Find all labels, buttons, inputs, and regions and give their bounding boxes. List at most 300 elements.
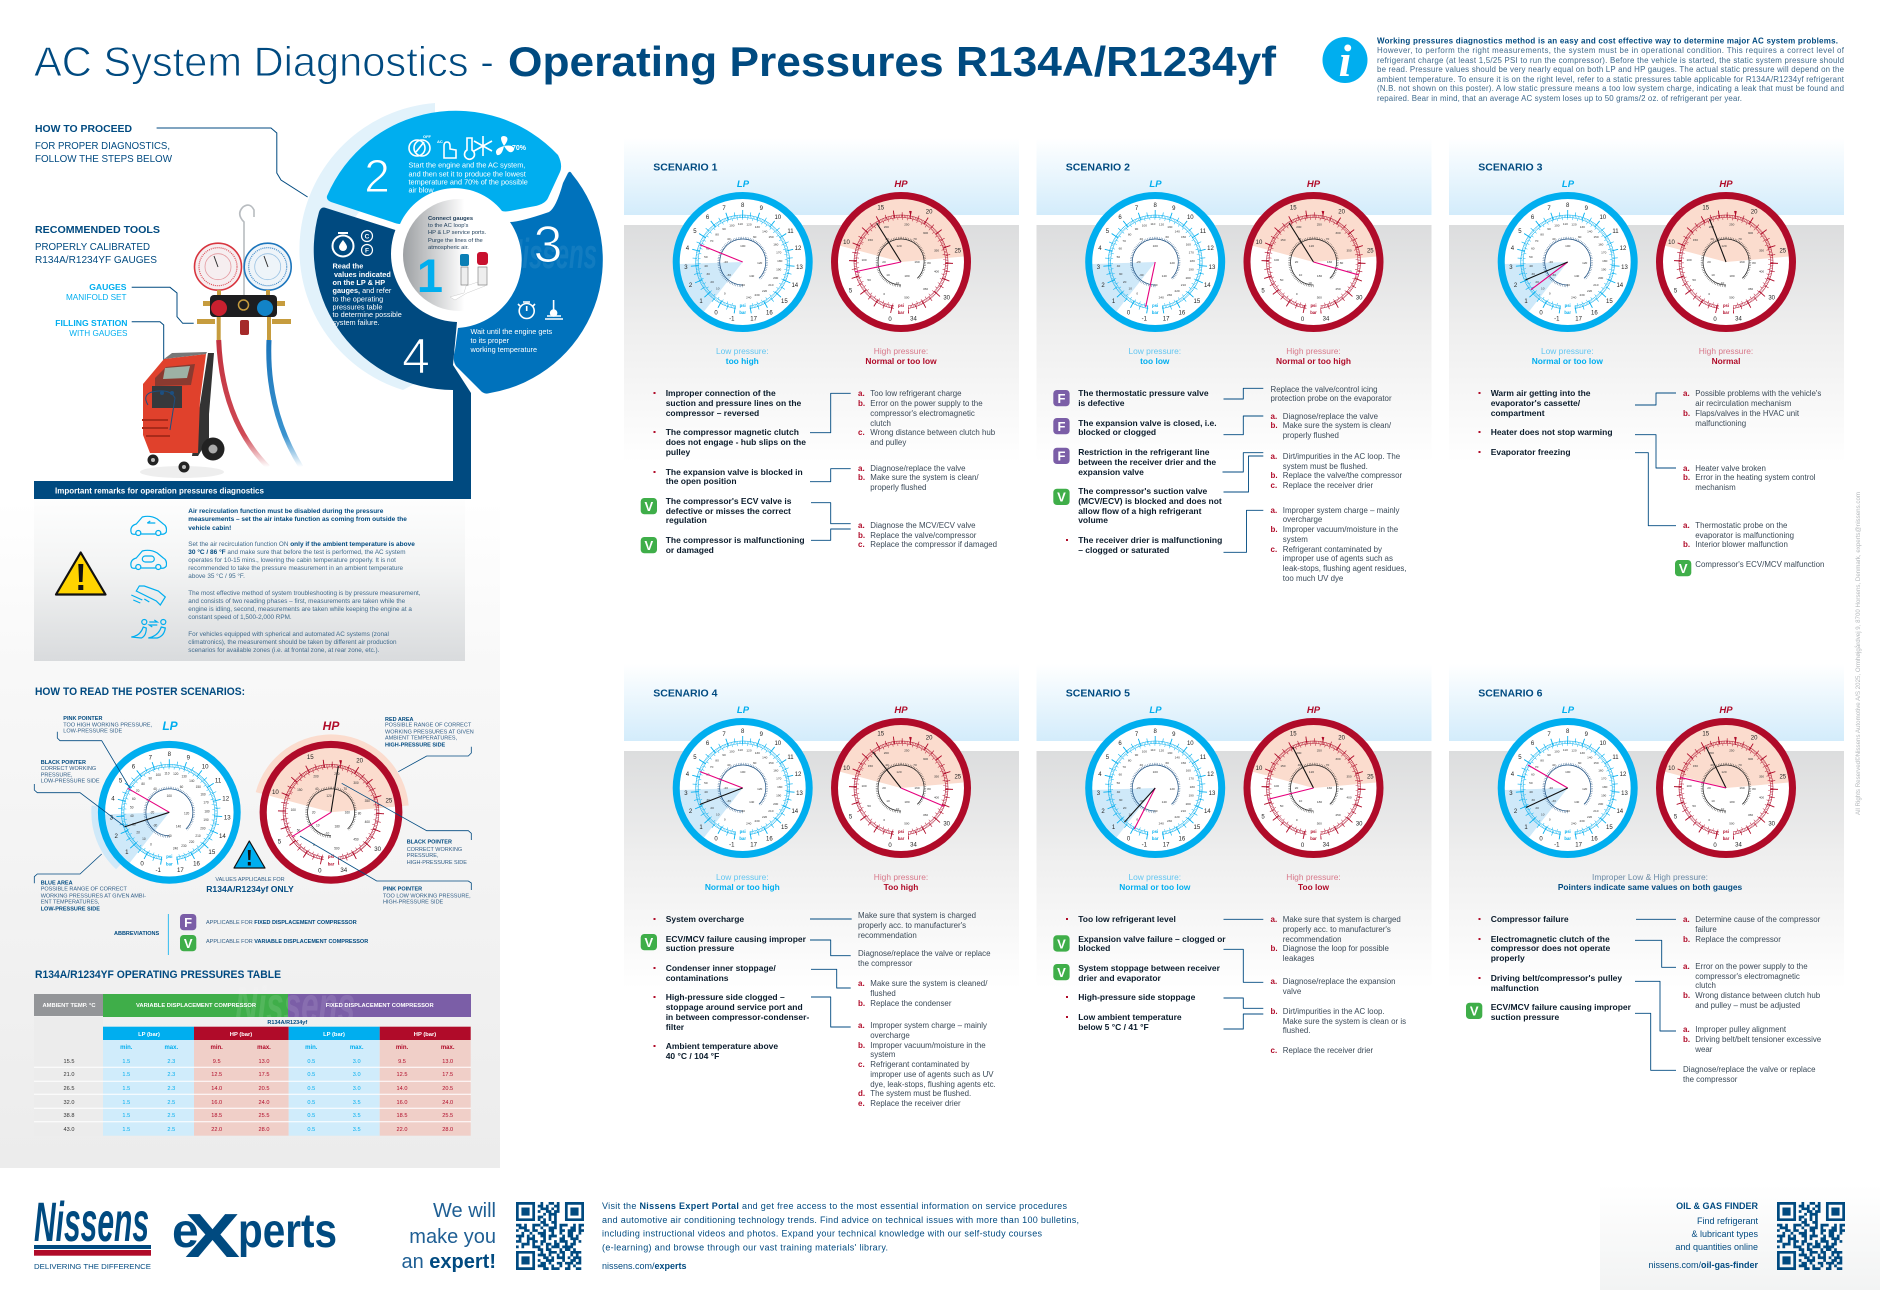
causes list [1053, 388, 1222, 555]
note: values applicable: R134A/R1234yf ONLY [206, 884, 294, 894]
table: operating pressures: 3.5 [353, 1100, 361, 1106]
solutions list: The system must be flushed. [870, 1089, 971, 1098]
icon: warning triangle [56, 552, 106, 594]
icon: car recirculation on [131, 550, 167, 570]
icon: info: i [1339, 35, 1352, 86]
remarks text: 30 °C / 86 °F and make sure that before the test is performed, the AC system [188, 548, 405, 556]
solutions list: Heater valve broken [1695, 464, 1766, 473]
causes list: Warm air getting into the [1491, 388, 1591, 398]
table: operating pressures: 22.0 [211, 1127, 222, 1133]
solutions list: too much UV dye [1283, 574, 1344, 583]
logo: Nissens: Nissens [34, 1190, 149, 1253]
solutions list: Refrigerant contaminated by [870, 1060, 969, 1069]
panel: step 4 [314, 208, 471, 481]
table: operating pressures: 1.5 [122, 1100, 130, 1106]
solutions list: Replace the receiver drier [870, 1099, 961, 1108]
gauge: LP [1089, 722, 1222, 854]
gauge: example LP [91, 744, 237, 880]
connector lines [810, 393, 851, 540]
gauge: HP [834, 722, 968, 854]
connector lines [1222, 388, 1263, 552]
panel: step 3: Nissens [505, 230, 597, 277]
gauge: HP [1247, 722, 1380, 854]
title: AC System Diagnostics - [34, 38, 494, 85]
table: operating pressures: 32.0 [64, 1100, 74, 1106]
table: operating pressures: 3.5 [353, 1113, 361, 1119]
icon: service port fittings [450, 252, 488, 300]
causes list: – clogged or saturated [1078, 545, 1169, 555]
abbreviations legend: ABBREVIATIONS [114, 931, 159, 937]
solutions list: b. [858, 473, 865, 482]
icons: stopwatch and thermometer [518, 300, 563, 319]
table: operating pressures: HP (bar) [230, 1032, 252, 1038]
table: operating pressures: 0.5 [307, 1086, 315, 1092]
table: operating pressures: 2.3 [167, 1072, 175, 1078]
icon: blue warning triangle [234, 841, 265, 868]
panel: scenario 1: LP [737, 179, 750, 190]
intro text block: repaired. Bear in mind, that an average AC system loses up to 50 grams/2 oz. of refrigerant per year. [1377, 94, 1742, 103]
panel: step 2: AC [437, 139, 443, 144]
table: operating pressures: 2.5 [167, 1127, 175, 1133]
panel: important remarks [34, 481, 471, 661]
solutions list: a. [858, 979, 865, 988]
causes list [641, 914, 809, 1061]
slogan: make you [409, 1226, 496, 1248]
solutions list: d. [858, 1089, 865, 1098]
panel: step 2: temperature and 70% of the possible [408, 177, 528, 186]
causes list: Heater does not stop warming [1491, 427, 1613, 437]
table: operating pressures: 2.3 [167, 1059, 175, 1065]
annotation: pink pointer LP: TOO HIGH WORKING PRESSURE, [63, 723, 153, 729]
text block: recommended tools: RECOMMENDED TOOLS [35, 224, 160, 236]
panel: scenario 3 [1449, 138, 1844, 576]
slogan: We will [433, 1200, 496, 1222]
solutions list: Make sure the system is clean/ [1283, 421, 1392, 430]
annotation: blue area: BLUE AREA [41, 881, 73, 887]
solutions list: the compressor [1683, 1075, 1738, 1084]
causes list: The receiver drier is malfunctioning [1078, 535, 1222, 545]
gauge labels: LP [162, 719, 179, 733]
heading: how to read: HOW TO READ THE POSTER SCENARIOS: [35, 686, 245, 698]
causes list: ECV/MCV failure causing improper [666, 934, 807, 944]
gauge: LP [676, 196, 809, 328]
table: operating pressures: min. [305, 1045, 318, 1051]
solutions list: air recirculation mechanism [1695, 399, 1792, 408]
causes list: in between compressor-condenser- [666, 1012, 809, 1022]
causes list [1466, 914, 1632, 1022]
annotation: black pointer HP: HIGH-PRESSURE SIDE [407, 860, 467, 866]
table: operating pressures: 2.5 [167, 1100, 175, 1106]
causes list: malfunction [1491, 983, 1539, 993]
solutions list: system [1283, 535, 1308, 544]
solutions list: c. [858, 428, 865, 437]
solutions list: clutch [870, 419, 891, 428]
solutions list: a. [1683, 962, 1690, 971]
solutions list: Make sure that system is charged [1283, 915, 1401, 924]
panel: scenario 5 [1036, 664, 1432, 1055]
remarks text: above 35 °C / 95 °F. [188, 572, 245, 580]
panel: step 4: Read the [332, 262, 363, 271]
remarks text: engine is idling, second, measurements are taken while keeping the engine at a [188, 606, 412, 613]
gauge readings [1532, 346, 1753, 366]
table: operating pressures: 24.0 [442, 1100, 453, 1106]
causes list: is defective [1078, 398, 1125, 408]
gauge readings: Normal or too low [865, 356, 937, 366]
heading: pressures table: R134A/R1234YF OPERATING PRESSURES TABLE [35, 969, 281, 981]
remarks text: vehicle cabin! [188, 525, 231, 532]
causes list: contaminations [666, 973, 729, 983]
solutions list: Diagnose/replace the expansion [1283, 977, 1396, 986]
causes list: below 5 °C / 41 °F [1078, 1022, 1149, 1032]
table: operating pressures: max. [164, 1045, 178, 1051]
solutions list: b. [1270, 525, 1278, 534]
table: operating pressures: 16.0 [211, 1100, 222, 1106]
causes list: System overcharge [666, 914, 744, 924]
table: operating pressures: 24.0 [259, 1100, 269, 1106]
solutions list: Possible problems with the vehicle's [1695, 389, 1821, 398]
gauge readings: High pressure: [1699, 346, 1753, 356]
table: operating pressures: min. [120, 1045, 133, 1051]
table: operating pressures: min. [396, 1045, 408, 1051]
solutions list: Error on the power supply to the [870, 399, 983, 408]
solutions list [858, 911, 996, 1108]
intro text block: However, to perform the right measurements, the system must be in operational condition. This requires a correct level of [1377, 46, 1845, 55]
table: operating pressures: 3.0 [353, 1086, 361, 1092]
connector lines [1635, 919, 1676, 1070]
solutions list: a. [858, 389, 865, 398]
gauge readings: Normal or too high [1276, 356, 1351, 366]
solutions list: Diagnose/replace the valve [1283, 412, 1379, 421]
gauge readings [1119, 872, 1341, 892]
gauge: HP [1660, 722, 1792, 854]
oil and gas finder text [1648, 1201, 1758, 1270]
table: operating pressures: 3.5 [353, 1127, 361, 1133]
solutions list: b. [1683, 935, 1690, 944]
table: operating pressures: max. [257, 1045, 271, 1051]
solutions list: Improper system charge – mainly [870, 1021, 987, 1030]
panel: step 3: 3 [534, 216, 562, 274]
panel: step 2: 2 [364, 150, 390, 202]
solutions list: Improper pulley alignment [1695, 1025, 1787, 1034]
causes list: The compressor is malfunctioning [666, 535, 805, 545]
text block: filling station label [55, 318, 128, 338]
causes list: (MCV/ECV) is blocked and does not [1078, 496, 1222, 506]
gauge readings: Improper Low & High pressure: [1592, 872, 1708, 882]
solutions list: b. [1683, 473, 1690, 482]
solutions list: b. [858, 531, 865, 540]
gauge readings [716, 346, 937, 366]
panel: scenario 1: SCENARIO 1 [653, 162, 718, 174]
solutions list: Replace the condenser [870, 999, 952, 1008]
slogan: an expert! [401, 1251, 496, 1273]
panel: scenario 5: SCENARIO 5 [1066, 688, 1130, 700]
solutions list: malfunctioning [1695, 419, 1746, 428]
panel: step 4: on the LP & HP [332, 278, 385, 287]
solutions list: b. [858, 999, 865, 1008]
table: operating pressures: 0.5 [307, 1113, 315, 1119]
solutions list: improper use of agents such as UV [870, 1070, 994, 1079]
title: Operating Pressures R134A/R1234yf [508, 38, 1277, 85]
solutions list: Replace the receiver drier [1283, 1046, 1374, 1055]
solutions list: c. [1270, 545, 1277, 554]
solutions list: Error on the power supply to the [1695, 962, 1808, 971]
panel: scenario 5: LP [1149, 705, 1162, 716]
causes list: Compressor failure [1491, 914, 1569, 924]
panel: step 4: system failure. [332, 318, 380, 327]
solutions list: b. [1683, 991, 1690, 1000]
remarks text: operates for 10-15 mins., lowering the cabin temperature properly. It is not [188, 557, 396, 564]
table: operating pressures: 22.0 [397, 1127, 407, 1133]
slogan [401, 1200, 496, 1273]
table: operating pressures: FIXED DISPLACEMENT COMPRESSOR [326, 1003, 434, 1009]
panel: step 4: gauges, and refer [332, 286, 392, 295]
logo: Nissens: DELIVERING THE DIFFERENCE [34, 1262, 151, 1271]
table: operating pressures: 2.3 [167, 1086, 175, 1092]
remarks text: Air recirculation function must be disabled during the pressure [188, 508, 384, 515]
solutions list: dye, leak-stops, flushing agents etc. [870, 1080, 996, 1089]
gauge readings [705, 872, 928, 892]
solutions list: recommendation [1283, 935, 1342, 944]
annotation: red area: POSSIBLE RANGE OF CORRECT [385, 723, 472, 729]
solutions list: a. [1683, 521, 1690, 530]
table: operating pressures: Nissens [235, 977, 355, 1033]
table: operating pressures: 3.0 [353, 1059, 361, 1065]
solutions list: properly acc. to manufacturer's [1283, 925, 1391, 934]
icon: stopwatch and units [332, 230, 372, 256]
panel: scenario 6: HP [1719, 705, 1733, 716]
panel: step 1 hub: atmospheric air. [428, 245, 469, 251]
gauge readings: High pressure: [874, 346, 928, 356]
text block: gauges label: GAUGES [89, 282, 127, 292]
solutions list: Replace the valve/control icing [1270, 385, 1378, 394]
causes list: filter [666, 1022, 685, 1032]
table: operating pressures: 0.5 [307, 1100, 315, 1106]
remarks text: Set the air recirculation function ON only if the ambient temperature is above [188, 541, 415, 548]
abbreviations legend: APPLICABLE FOR VARIABLE DISPLACEMENT COMPRESSOR [206, 939, 368, 945]
causes list: Electromagnetic clutch of the [1491, 934, 1610, 944]
icon: QR code expert portal [516, 1202, 584, 1270]
annotation: red area: AMBIENT TEMPERATURES, [385, 736, 458, 742]
causes list: evaporator's cassette/ [1491, 398, 1581, 408]
table: operating pressures: 25.5 [442, 1113, 453, 1119]
table: operating pressures: LP (bar) [323, 1032, 345, 1038]
gauge readings: Normal or too high [705, 882, 780, 892]
gauge readings: Low pressure: [1128, 872, 1181, 882]
causes list: allow flow of a high refrigerant [1078, 506, 1202, 516]
solutions list: flushed. [1283, 1026, 1310, 1035]
gauge: HP [1247, 196, 1380, 328]
table: operating pressures: 0.5 [307, 1072, 315, 1078]
table: operating pressures: 26.5 [64, 1086, 74, 1092]
remarks text: and consists of two reading phases – first, measurements are taken while the [188, 598, 406, 605]
table: operating pressures: 43.0 [64, 1127, 74, 1133]
solutions list: Replace the valve/compressor [870, 531, 977, 540]
text block: how to proceed: HOW TO PROCEED [35, 123, 132, 135]
table: operating pressures: 1.5 [122, 1127, 130, 1133]
solutions list [1683, 915, 1822, 1084]
panel: step 1 hub: Purge the lines of the [428, 238, 483, 244]
causes list: blocked [1078, 943, 1110, 953]
solutions list: Replace the valve/the compressor [1283, 471, 1402, 480]
causes list: Driving belt/compressor's pulley [1491, 973, 1622, 983]
solutions list: a. [1270, 412, 1277, 421]
solutions list: Interior blower malfunction [1695, 540, 1788, 549]
causes list: compartment [1491, 408, 1545, 418]
solutions list: Improper system charge – mainly [1283, 506, 1400, 515]
table: operating pressures: 13.0 [442, 1059, 453, 1065]
gauge readings: Normal or too low [1119, 882, 1191, 892]
intro text block: (N.B. not shown on this poster). A low static pressure means a too low system charge, indicating a leak that must be found and [1377, 84, 1844, 93]
causes list: Expansion valve failure – clogged or [1078, 934, 1226, 944]
causes list: compressor does not operate [1491, 943, 1610, 953]
table: operating pressures: 9.5 [213, 1059, 221, 1065]
annotation: blue area [41, 881, 146, 913]
solutions list: b. [1683, 1035, 1690, 1044]
table: operating pressures: 17.5 [442, 1072, 453, 1078]
side copyright text: All Rights Reserved©Nissens Automotive A/S 2025, Ormhøjgårdvej 9, 8700 Horsens, Denmark, experts@nissens.com [1854, 492, 1862, 815]
solutions list: a. [1270, 977, 1277, 986]
table: operating pressures: 13.0 [259, 1059, 269, 1065]
causes list: ECV/MCV failure causing improper [1491, 1002, 1632, 1012]
solutions list: c. [858, 540, 865, 549]
table: operating pressures: 20.5 [442, 1086, 453, 1092]
text block: how to proceed: FOLLOW THE STEPS BELOW [35, 153, 172, 165]
solutions list: Replace the receiver drier [1283, 481, 1374, 490]
solutions list: a. [1683, 1025, 1690, 1034]
gauge readings [1128, 346, 1351, 366]
solutions list: overcharge [870, 1031, 910, 1040]
solutions list: Error in the heating system control [1695, 473, 1816, 482]
halo behind steps wheel [299, 103, 435, 390]
causes list: High-pressure side clogged – [666, 992, 785, 1002]
solutions list [858, 389, 997, 549]
causes list: The compressor's ECV valve is [666, 496, 792, 506]
icon: car recirculation off [131, 516, 167, 536]
table: operating pressures: 28.0 [442, 1127, 453, 1133]
annotation: black pointer LP: BLACK POINTER [41, 760, 86, 766]
remarks text [188, 508, 421, 654]
table: operating pressures: 25.5 [259, 1113, 269, 1119]
solutions list: b. [1683, 409, 1690, 418]
solutions list: properly acc. to manufacturer's [858, 921, 966, 930]
causes list: The compressor magnetic clutch [666, 427, 799, 437]
abbreviations legend [114, 914, 368, 955]
solutions list: system [870, 1050, 896, 1059]
solutions list: a. [1270, 452, 1277, 461]
panel: scenario 5: HP [1307, 705, 1321, 716]
solutions list: wear [1694, 1045, 1713, 1054]
solutions list: leakages [1283, 954, 1314, 963]
causes list: suction pressure [1491, 1012, 1559, 1022]
panel: scenario 4: HP [894, 705, 908, 716]
solutions list: Driving belt/belt tensioner excessive [1695, 1035, 1822, 1044]
logo: experts: X [185, 1202, 240, 1271]
solutions list: Thermostatic probe on the [1695, 521, 1788, 530]
panel: step 4: F [365, 247, 369, 254]
panel: step 2: Start the engine and the AC system, [408, 160, 525, 169]
oil and gas finder text: Find refrigerant [1697, 1216, 1758, 1226]
solutions list: a. [1270, 506, 1277, 515]
annotation: pink pointer LP: LOW-PRESSURE SIDE [63, 729, 123, 735]
annotation: blue area: WORKING PRESSURES AT GIVEN AMBI- [41, 894, 146, 900]
annotation: blue area: LOW-PRESSURE SIDE [41, 907, 100, 913]
solutions list: the compressor [858, 959, 913, 968]
footer text [602, 1201, 1079, 1271]
table: operating pressures: 3.0 [353, 1072, 361, 1078]
solutions list: b. [1270, 944, 1278, 953]
causes list: suction and pressure lines on the [666, 398, 802, 408]
icon: QR code oil and gas finder [1777, 1202, 1845, 1270]
solutions list: flushed [870, 989, 896, 998]
intro text block: refrigerant charge (at least 1,5/25 PSI to run the compressor). Before the vehicle is started, the static system pressure should [1377, 56, 1844, 65]
panel: scenario 4: SCENARIO 4 [653, 688, 718, 700]
causes list: expansion valve [1078, 467, 1144, 477]
panel: step 3 [454, 172, 603, 394]
solutions list: Make sure the system is clean or is [1283, 1017, 1406, 1026]
causes list [641, 388, 806, 555]
gauge labels: HP [323, 719, 340, 733]
causes list: Low ambient temperature [1078, 1012, 1182, 1022]
panel: scenario 3: SCENARIO 3 [1478, 162, 1543, 174]
causes list: Restriction in the refrigerant line [1078, 447, 1210, 457]
note: values applicable: VALUES APPLICABLE FOR [215, 877, 285, 883]
annotation: black pointer HP: CORRECT WORKING [407, 847, 462, 853]
causes list: volume [1078, 515, 1108, 525]
solutions list: Compressor's ECV/MCV malfunction [1695, 560, 1824, 569]
panel: step 3: to its proper [470, 336, 510, 345]
remarks text: The most effective method of system troubleshooting is by pressure measurement, [188, 590, 421, 597]
solutions list: properly flushed [870, 483, 926, 492]
table: operating pressures: R134A/R1234yf [267, 1020, 307, 1026]
table: operating pressures: 14.0 [211, 1086, 222, 1092]
table: operating pressures: 1.5 [122, 1059, 130, 1065]
solutions list: b. [1270, 421, 1278, 430]
solutions list: Make sure the system is clean/ [870, 473, 979, 482]
causes list: regulation [666, 515, 707, 525]
table: operating pressures: LP (bar) [138, 1032, 160, 1038]
causes list: The expansion valve is closed, i.e. [1078, 418, 1217, 428]
logo: experts: perts [238, 1205, 337, 1258]
panel: scenario 6 [1449, 664, 1844, 1084]
left column background [0, 500, 500, 1168]
footer text: (e-learning) and browse through our vast training materials' library. [602, 1242, 888, 1252]
remarks text: climatronics), the measurement should be taken by different air production [188, 639, 397, 646]
gauge: LP [676, 722, 809, 854]
table: operating pressures: 21.0 [64, 1072, 74, 1078]
solutions list [1675, 389, 1824, 576]
solutions list: Diagnose the loop for possible [1283, 944, 1390, 953]
table: operating pressures: 14.0 [397, 1086, 407, 1092]
annotation: black pointer HP [407, 840, 467, 866]
panel: scenario 3: LP [1562, 179, 1575, 190]
solutions list: overcharge [1283, 515, 1323, 524]
gauge readings: Pointers indicate same values on both gauges [1558, 882, 1742, 892]
solutions list: clutch [1695, 981, 1716, 990]
causes list [1053, 914, 1226, 1032]
text block: filling station label: FILLING STATION [55, 318, 128, 328]
oil and gas finder text: nissens.com/oil-gas-finder [1648, 1260, 1758, 1270]
table: operating pressures: 28.0 [259, 1127, 269, 1133]
causes list: compressor – reversed [666, 408, 759, 418]
intro text block: ambient temperature. To ensure it is on the right level, refer to a static pressures table applicable for R134A/R1234yf refrigerant [1377, 75, 1845, 84]
annotation: red area: WORKING PRESSURES AT GIVEN [385, 730, 474, 736]
table: operating pressures: 0.5 [307, 1127, 315, 1133]
panel: scenario 2: HP [1307, 179, 1321, 190]
leader lines: tools [132, 287, 194, 360]
annotation: pink pointer LP: PINK POINTER [63, 716, 102, 722]
panel: step 4: pressures table [332, 303, 382, 312]
gauge readings: High pressure: [874, 872, 928, 882]
